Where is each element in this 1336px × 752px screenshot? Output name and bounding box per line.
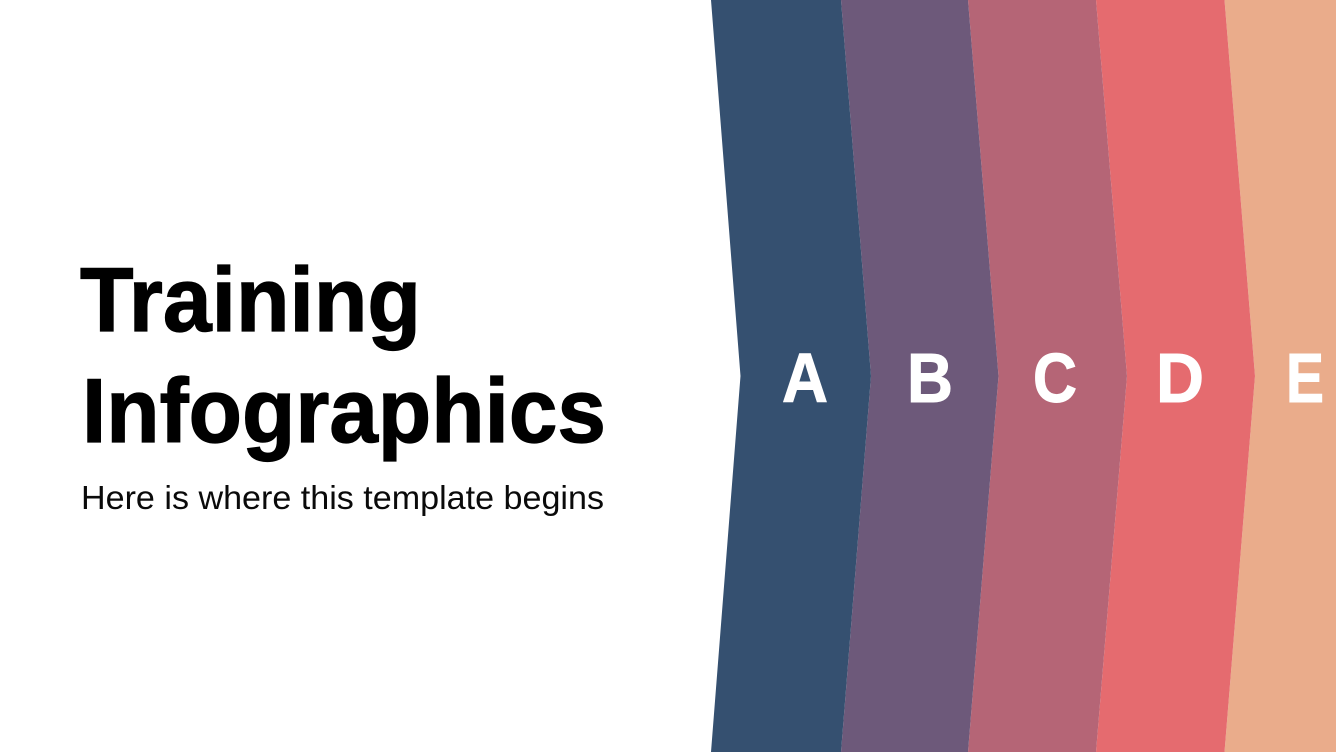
- band C: [968, 0, 1127, 752]
- chevron bands: [711, 0, 1336, 752]
- band B: [841, 0, 998, 752]
- letter B: B: [907, 339, 953, 417]
- subtitle: Here is where this template begins: [81, 479, 604, 516]
- title: Training: [80, 250, 421, 351]
- band A: [711, 0, 871, 752]
- letter A: A: [782, 339, 828, 417]
- band E: [1224, 0, 1336, 752]
- title: [80, 250, 606, 462]
- letter C: C: [1033, 339, 1077, 417]
- band letters: [782, 339, 1324, 417]
- band D: [1096, 0, 1255, 752]
- title: Infographics: [82, 361, 606, 462]
- letter E: E: [1286, 339, 1324, 417]
- letter D: D: [1156, 339, 1204, 417]
